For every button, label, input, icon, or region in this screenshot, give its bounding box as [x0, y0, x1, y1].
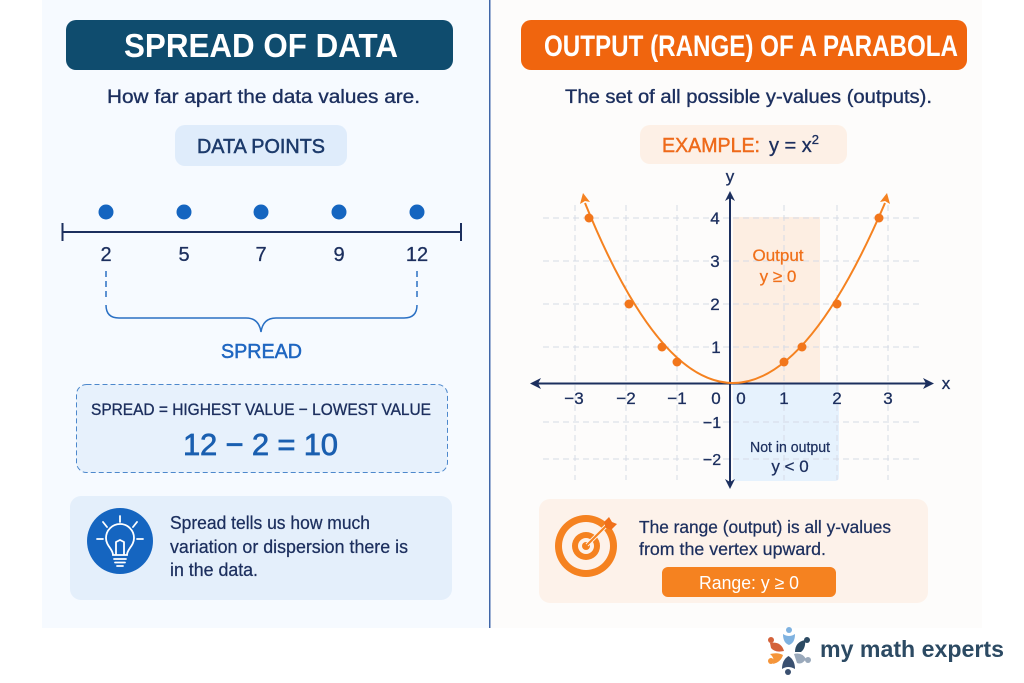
- axis numbers: −1: [703, 415, 721, 432]
- icon: target: [555, 515, 617, 577]
- callout: spread meaning: [70, 496, 452, 600]
- callout: range meaning: The range (output) is all y-values: [639, 517, 891, 537]
- divider: [489, 0, 490, 628]
- output region: [733, 217, 820, 383]
- callout: spread meaning: in the data.: [170, 560, 258, 580]
- title: output of a parabola: [521, 20, 967, 70]
- axis numbers: 2: [710, 295, 720, 314]
- label: not in output: [750, 439, 831, 476]
- excluded region: [733, 383, 839, 481]
- axis numbers: 0: [711, 389, 721, 408]
- label: example equation: y = x: [769, 135, 812, 157]
- axes: [530, 167, 951, 489]
- chart: parabola y = x squared: [530, 167, 951, 489]
- subtitle: spread definition: How far apart the data values are.: [107, 87, 420, 108]
- title: spread of data: SPREAD OF DATA: [124, 27, 398, 64]
- callout: spread meaning: Spread tells us how much: [170, 513, 370, 533]
- label: output: [752, 246, 804, 286]
- axis numbers: −3: [564, 389, 584, 408]
- icon: logo people: [768, 627, 811, 675]
- number line with data points: 7: [255, 244, 267, 266]
- callout: range meaning: from the vertex upward.: [639, 539, 826, 559]
- label: output: Output: [752, 246, 804, 265]
- label: not in output: y < 0: [771, 457, 809, 476]
- icon: light bulb: [87, 508, 153, 574]
- axis numbers: −1: [667, 389, 687, 408]
- axis numbers: −2: [703, 452, 721, 469]
- callout: range meaning: [539, 499, 928, 603]
- axis numbers: −2: [616, 389, 636, 408]
- axis numbers: 3: [710, 252, 720, 271]
- number line with data points: 5: [178, 244, 190, 266]
- label: example equation: EXAMPLE:: [662, 135, 760, 157]
- axes: x: [942, 374, 951, 393]
- panel: spread of data: [42, 0, 489, 628]
- number line with data points: 12: [406, 244, 428, 266]
- label: example equation: 2: [812, 132, 819, 147]
- number line with data points: 9: [333, 244, 345, 266]
- axis numbers: 1: [779, 389, 789, 408]
- axes: y: [726, 167, 735, 186]
- badge: range result: [662, 567, 836, 597]
- axis numbers: [564, 209, 893, 469]
- logo: my math experts: my math experts: [820, 636, 1004, 662]
- axis numbers: 2: [832, 389, 842, 408]
- title: spread of data: [66, 20, 453, 70]
- axis numbers: 0: [736, 389, 746, 408]
- number line with data points: 2: [100, 244, 112, 266]
- logo: my math experts: [768, 627, 1004, 675]
- axis numbers: 3: [883, 389, 893, 408]
- label: output: y ≥ 0: [760, 267, 796, 286]
- bracket: spread from 2 to 12: [106, 271, 417, 363]
- bracket: spread from 2 to 12: SPREAD: [221, 341, 302, 363]
- number line with data points: [62, 204, 461, 266]
- subtitle: range definition: The set of all possible y-values (outputs).: [565, 87, 932, 108]
- label: data points: DATA POINTS: [197, 136, 325, 158]
- formula box: 12 − 2 = 10: [183, 427, 338, 462]
- formula box: [76, 384, 448, 472]
- label: data points: [175, 125, 347, 166]
- label: example equation: [640, 125, 847, 164]
- axis numbers: 4: [710, 209, 720, 228]
- callout: spread meaning: variation or dispersion there is: [170, 537, 408, 557]
- axis numbers: 1: [711, 338, 721, 357]
- formula box: SPREAD = HIGHEST VALUE − LOWEST VALUE: [91, 400, 431, 419]
- badge: range result: Range: y ≥ 0: [699, 573, 799, 593]
- panel: output of a parabola: [491, 0, 982, 628]
- label: not in output: Not in output: [750, 439, 831, 456]
- parabola curve: [580, 193, 890, 383]
